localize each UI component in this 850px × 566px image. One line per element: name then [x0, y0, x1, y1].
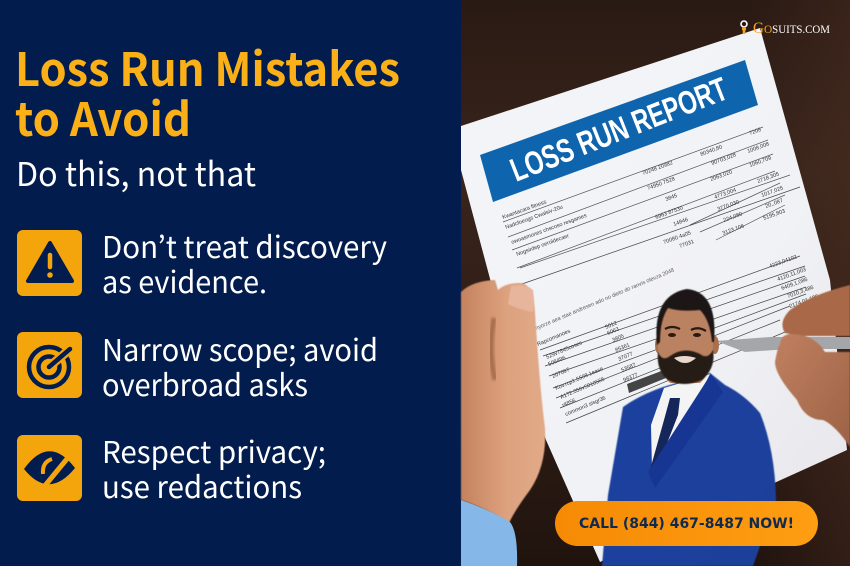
table text upper: Nadcfoeogs Cwalsiv-20u [505, 204, 564, 231]
table text lower: 529v7845coses [545, 340, 583, 361]
table text lower: 508496 [547, 355, 567, 368]
table text upper: 1017,025 [761, 185, 784, 199]
table text lower: Kov.rcp1.5508.1ease [554, 366, 604, 392]
table text lower: A172.056v5010565 [559, 377, 606, 401]
eyes [665, 327, 706, 331]
text: privacy: use redactions [102, 463, 302, 507]
table text lower: 3805 [611, 334, 625, 344]
shirt and tie [648, 374, 723, 488]
dark highlight bar [627, 370, 666, 393]
table text upper: 20,,087 [765, 198, 784, 210]
shirt sleeve [461, 500, 517, 566]
title: Loss Run Mistakes [15, 34, 400, 100]
subtitle: Do this, not that [16, 148, 256, 196]
attorney portrait [602, 289, 776, 566]
table text lower: 85361 [614, 342, 631, 354]
banner: loss run report: LOSS RUN REPORT [505, 70, 733, 189]
table text upper: 3770,030 [717, 199, 740, 213]
table text lower: r4856 [561, 398, 577, 409]
text: privacy: Respect privacy; [102, 428, 326, 472]
item: discovery warning [17, 223, 387, 302]
table text upper: 5195,803 [763, 208, 786, 222]
panel: left navy background [0, 0, 461, 566]
table text lower: 4223,04102 [769, 254, 798, 270]
title [15, 34, 400, 150]
right hand with pen [775, 285, 850, 447]
report paper [461, 28, 847, 562]
title: to Avoid [15, 84, 191, 150]
table lines upper [503, 127, 790, 268]
table text upper: Nogsirdep oeroldecaer [516, 233, 570, 258]
table text lower: 2174,01,180 [789, 294, 819, 310]
table text upper: 224,080 [723, 211, 743, 224]
head [655, 289, 719, 384]
table text lower: 6409,1,086 [781, 277, 809, 292]
banner: loss run report [480, 60, 758, 202]
table text lower: nyorze aea stae andresen ado no dieto do ranvis olevza 2048 [534, 268, 675, 332]
table text upper: 2718,305 [757, 171, 780, 185]
left hand holding paper [461, 280, 545, 523]
text: narrow scope: overbroad asks [102, 361, 308, 405]
text: discovery: Don’t treat discovery [102, 223, 387, 267]
table text lower: common3 sisgr36 [564, 395, 607, 418]
table text upper: 1060,709 [749, 155, 772, 169]
call to action button [555, 501, 818, 546]
table text upper: 6963 87530 [655, 205, 684, 221]
text: narrow scope [102, 326, 378, 405]
table text upper: 90703,028 [711, 152, 737, 167]
table text upper: 14846 [673, 217, 689, 228]
table text lower: Rapcomanoes [536, 328, 572, 348]
logo: gosuits.com: GOSUITS.COM [753, 20, 830, 37]
pen [716, 337, 850, 352]
call to action button: CALL (844) 467-8487 NOW! [579, 516, 794, 532]
table text lower: 4120,11,003 [777, 267, 807, 283]
table text lower: 6063 [606, 327, 620, 337]
icon: target [17, 332, 82, 398]
text: discovery: as evidence. [102, 258, 267, 302]
table text upper: 80340,80 [700, 144, 723, 158]
table text lower: 7010,3,486 [787, 285, 815, 300]
table text upper: 70248 20982 [642, 160, 674, 177]
table text upper: 70080 4a05 [663, 230, 692, 246]
suit [602, 373, 776, 566]
table text upper: 4773,004 [714, 187, 737, 201]
table text upper: 77031 [679, 239, 695, 250]
table text upper: 3123,106 [722, 223, 745, 237]
table text upper: 7208 [749, 127, 762, 137]
table text lower [534, 254, 819, 418]
table lines lower [522, 187, 806, 423]
item: narrow scope [17, 326, 378, 405]
item: privacy [17, 428, 326, 507]
text: privacy [102, 428, 326, 507]
icon: crossed eye [17, 435, 82, 501]
table text upper: 1008,008 [747, 141, 770, 155]
table text upper: 3845 [665, 193, 678, 203]
beard and mouth [658, 350, 714, 384]
panel: photo background wood desk [461, 0, 850, 566]
icon: key [741, 21, 747, 34]
table text upper [502, 127, 786, 258]
table text lower: 207097 [551, 367, 571, 380]
table text lower: 37077 [617, 351, 634, 363]
icon: warning triangle [17, 230, 82, 296]
table text upper: 2063,020 [710, 169, 733, 183]
table text upper: owoasmones chscoso resgames [511, 213, 588, 246]
table text lower: 53587 [620, 362, 637, 374]
text: narrow scope: Narrow scope; avoid [102, 326, 378, 370]
table text lower: 5012 [604, 321, 618, 331]
table text upper: Kwantacara fitness [502, 199, 548, 221]
text: discovery [102, 223, 387, 302]
table text lower: 98377 [622, 372, 639, 384]
table text upper: 74950 7528 [647, 176, 676, 192]
